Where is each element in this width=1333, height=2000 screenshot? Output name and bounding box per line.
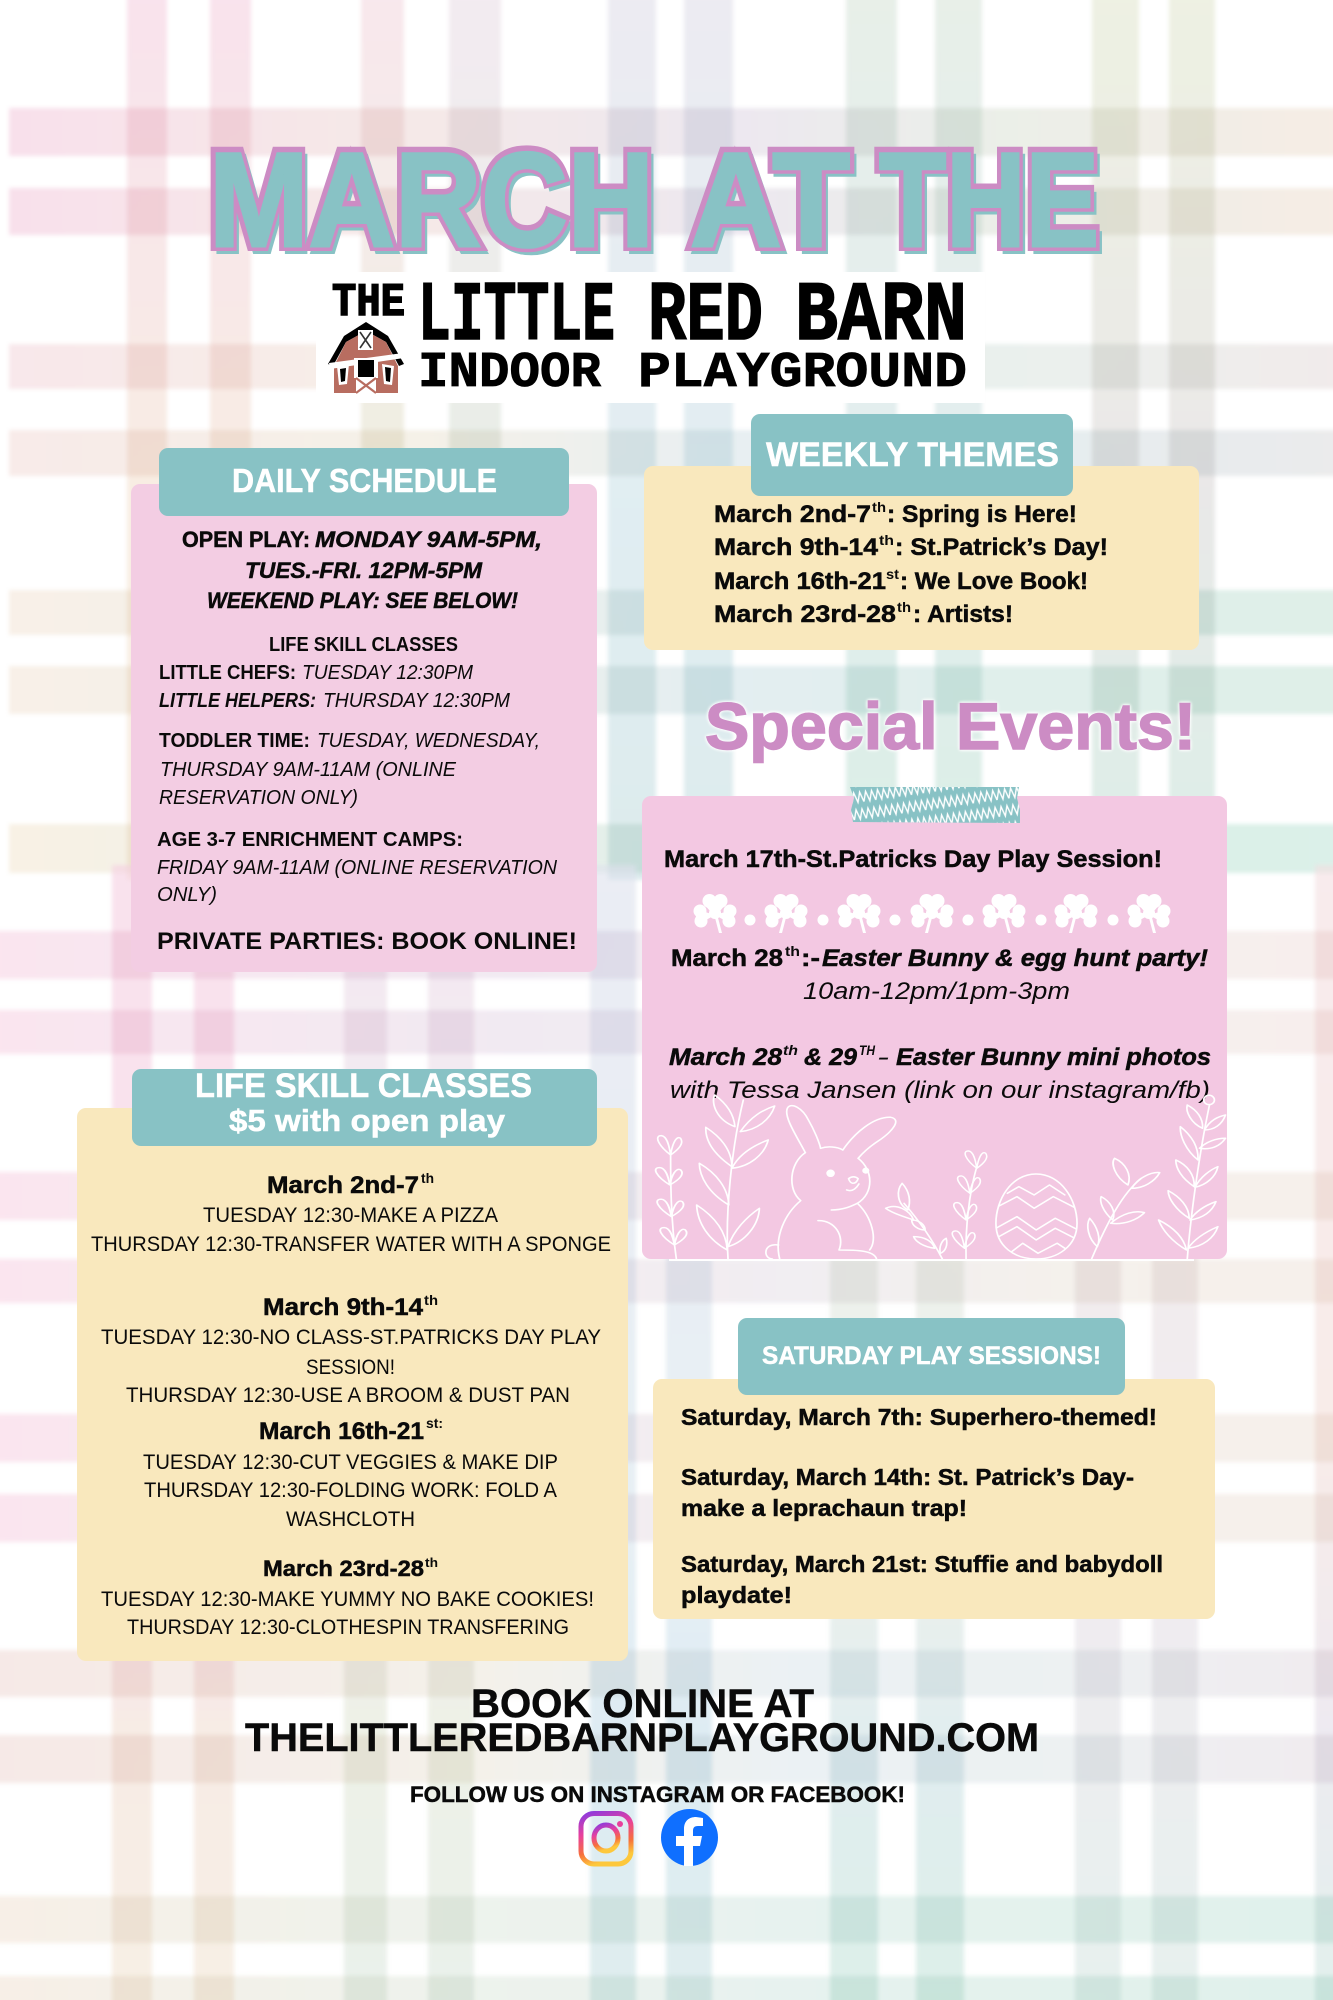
logo: The Little Red Barn Indoor Playground: RED [648,270,763,365]
text: enrichment camps: FRIDAY 9AM-11AM (ONLINE RESERVATION [157,857,558,879]
illustration: bunny, egg and plants [656,1095,1226,1259]
heading: daily schedule: DAILY SCHEDULE [232,462,497,499]
list: Saturday sessions [681,1404,1163,1608]
week: March 9th-14th [101,1292,601,1407]
text: life skill classes schedule: THURSDAY 12:30PM [323,690,510,712]
text: open play hours: OPEN PLAY: [182,527,310,552]
text: toddler time: THURSDAY 9AM-11AM (ONLINE [160,759,457,781]
text: enrichment camps: AGE 3-7 ENRICHMENT CAMPS: [157,829,463,851]
icon: egg [996,1174,1078,1259]
week: March 23rd-28th: th [425,1555,438,1570]
week: March 16th-21st: WASHCLOTH [286,1508,415,1531]
heading: daily schedule [159,448,569,516]
list: Saturday sessions: Saturday, March 14th: St. Patrick’s Day- [681,1464,1134,1490]
text: Easter bunny mini photos: th [783,1042,798,1058]
list: weekly themes: : Spring is Here! [887,501,1077,528]
text: Easter bunny mini photos: with Tessa Jansen (link on our instagram/fb) [670,1077,1210,1104]
list: Saturday sessions: playdate! [681,1582,792,1608]
footer: book online: BOOK ONLINE AT [471,1682,814,1726]
logo: The Little Red Barn Indoor Playground: BARN [795,270,967,365]
text: Easter bunny and egg hunt party: 10am-12pm/1pm-3pm [803,978,1070,1005]
panel: Saturday play sessions [653,1318,1215,1619]
text: life skill classes schedule: TUESDAY 12:30PM [302,662,473,684]
title: March at the: AT [689,125,850,274]
text: toddler time [159,730,540,809]
week: March 9th-14th: th [424,1292,438,1308]
week: March 23rd-28th: THURSDAY 12:30-CLOTHESPIN TRANSFERING [127,1616,569,1639]
title: March at the: THE [878,125,1099,274]
list: weekly themes: March 23rd-28 [714,601,896,628]
text: open play hours: WEEKEND PLAY: SEE BELOW! [207,588,518,613]
list: Saturday sessions: Saturday, March 7th: Superhero-themed! [681,1404,1157,1430]
week: March 2nd-7th: March 2nd-7 [267,1172,419,1199]
icon: facebook [661,1809,718,1866]
text: Easter bunny and egg hunt party: :- [801,945,820,972]
text: Easter bunny mini photos: TH [859,1042,876,1058]
icon: middle plants [886,1151,987,1259]
title: March at the [208,125,1103,279]
heading: weekly themes [751,414,1073,496]
list: weekly themes: th [897,599,911,615]
text: life skill classes schedule: LITTLE HELPERS: [159,690,316,712]
text: Easter bunny mini photos: - [877,1044,889,1071]
list: Saturday sessions: make a leprachaun trap! [681,1495,967,1521]
week: March 16th-21st: TUESDAY 12:30-CUT VEGGIES & MAKE DIP [143,1451,558,1474]
list: weekly themes: th [872,499,886,515]
week: March 23rd-28th: March 23rd-28 [263,1556,424,1581]
text: enrichment camps: ONLY) [157,884,217,906]
logo: The Little Red Barn Indoor Playground [316,270,985,403]
week: March 9th-14th: TUESDAY 12:30-NO CLASS-ST.PATRICKS DAY PLAY [101,1326,601,1349]
icon: instagram [581,1814,631,1864]
list: weekly themes: March 9th-14 [714,534,879,561]
title: March at the: AT [693,130,854,279]
week: March 16th-21st [143,1415,558,1531]
list: weekly themes: : St.Patrick’s Day! [895,534,1108,561]
week: March 9th-14th: March 9th-14 [263,1294,424,1321]
week: March 9th-14th: SESSION! [306,1356,395,1379]
week: March 2nd-7th [91,1170,611,1256]
text: Easter bunny mini photos: March 28 [669,1044,783,1071]
week: March 2nd-7th: th [421,1170,434,1186]
footer: book online [245,1682,1039,1760]
week: March 23rd-28th [101,1555,594,1639]
footer: follow us: FOLLOW US ON INSTAGRAM OR FACEBOOK! [410,1782,905,1807]
text: enrichment camps [157,829,558,906]
decoration: washi tape [850,787,1020,823]
decoration: shamrock row [694,894,1170,933]
week: March 23rd-28th: TUESDAY 12:30-MAKE YUMMY NO BAKE COOKIES! [101,1588,594,1611]
icon: right plants [1088,1095,1226,1259]
text: St. Patricks play session: March 17th-St.Patricks Day Play Session! [664,846,1162,873]
heading: life skill classes, $5 with open play: $5 with open play [229,1103,506,1138]
heading: life skill classes, $5 with open play: LIFE SKILL CLASSES [195,1067,532,1105]
icon: bunny [766,1106,896,1259]
text: life skill classes schedule: LITTLE CHEFS: [159,662,296,684]
text: Easter bunny mini photos: Easter Bunny mini photos [896,1044,1211,1071]
week: March 9th-14th: THURSDAY 12:30-USE A BROOM & DUST PAN [126,1384,570,1407]
panel: weekly themes [644,414,1199,650]
logo: The Little Red Barn Indoor Playground: PLAYGROUND [638,345,967,402]
week: March 16th-21st: st: [426,1415,443,1431]
panel: special events [642,787,1227,1261]
week: March 2nd-7th: TUESDAY 12:30-MAKE A PIZZA [203,1204,498,1227]
text: open play hours: TUES.-FRI. 12PM-5PM [245,558,483,583]
text: open play hours: MONDAY 9AM-5PM, [315,527,542,552]
week: March 2nd-7th: THURSDAY 12:30-TRANSFER WATER WITH A SPONGE [91,1233,611,1256]
list: weekly themes: : Artists! [913,601,1013,628]
heading: Saturday play sessions [738,1318,1125,1395]
title: March at the: MARCH [208,125,654,274]
text: Easter bunny mini photos [669,1042,1211,1104]
text: Easter bunny mini photos: & 29 [804,1044,858,1071]
title: March at the: THE [882,130,1103,279]
text: Easter bunny and egg hunt party: March 28 [671,945,783,972]
text: toddler time: RESERVATION ONLY) [159,787,358,809]
list: Saturday sessions: Saturday, March 21st: Stuffie and babydoll [681,1551,1163,1577]
week: March 16th-21st: THURSDAY 12:30-FOLDING WORK: FOLD A [144,1479,557,1502]
panel: life skill classes [77,1067,628,1661]
icon: barn [328,322,404,393]
text: life skill classes schedule: LIFE SKILL CLASSES [269,634,458,656]
logo: The Little Red Barn Indoor Playground: LITTLE [418,270,615,365]
list: weekly themes: March 16th-21 [714,568,886,595]
list: weekly themes: : We Love Book! [900,568,1088,595]
text: Easter bunny and egg hunt party [671,943,1208,1005]
icon: left plants [656,1095,775,1259]
panel: daily schedule [131,448,597,972]
text: private parties: PRIVATE PARTIES: BOOK ONLINE! [157,928,577,955]
week: March 16th-21st: March 16th-21 [259,1418,424,1445]
list: weekly themes: March 2nd-7 [714,501,871,528]
text: toddler time: TUESDAY, WEDNESDAY, [317,730,540,752]
title: March at the: AT [690,126,850,275]
text: life skill classes schedule [159,634,510,712]
text: Easter bunny and egg hunt party: Easter Bunny & egg hunt party! [822,945,1208,972]
heading: special events: Special Events! [705,689,1196,763]
title: March at the: MARCH [212,130,658,279]
list: weekly themes: st [886,566,899,582]
heading: Saturday play sessions: SATURDAY PLAY SESSIONS! [762,1342,1101,1370]
footer: book online: THELITTLEREDBARNPLAYGROUND.COM [245,1716,1039,1760]
text: Easter bunny and egg hunt party: th [785,943,800,959]
list: weekly themes: th [879,532,894,548]
title: March at the: MARCH [209,126,654,275]
text: open play hours [182,527,542,613]
heading: life skill classes, $5 with open play [132,1067,597,1146]
text: toddler time: TODDLER TIME: [159,730,310,752]
list: weekly themes [714,499,1108,628]
logo: The Little Red Barn Indoor Playground: THE [332,277,405,329]
heading: weekly themes: WEEKLY THEMES [766,436,1059,474]
title: March at the: THE [879,126,1099,275]
logo: The Little Red Barn Indoor Playground: INDOOR [418,345,601,402]
